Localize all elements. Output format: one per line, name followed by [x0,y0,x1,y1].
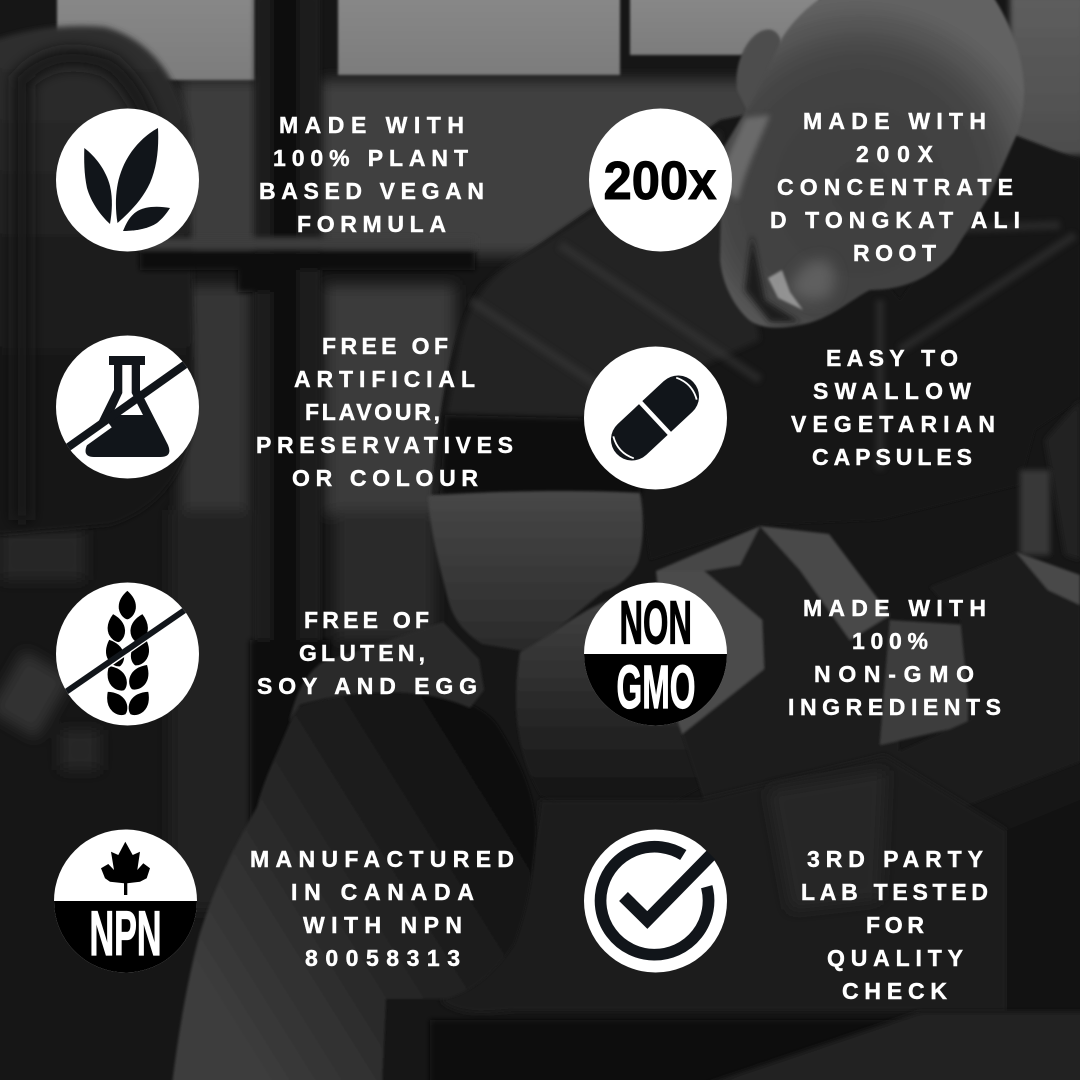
dumbbell [656,526,1080,807]
text: free of gluten: SOY AND EGG [257,673,477,699]
text: plant based [259,112,484,237]
icon: crossed out wheat [56,582,199,726]
text: lab tested: LAB TESTED [801,879,988,905]
text: free of gluten [257,607,477,699]
man: ear [737,29,782,115]
text: manufactured in canada: MANUFACTURED [250,846,514,872]
text: lab tested: 3RD PARTY [807,846,983,872]
man: short hem [289,622,484,722]
man: forearm [516,600,705,830]
text: non-gmo [788,595,1001,720]
text: lab tested: FOR [866,912,924,938]
text: non-gmo: INGREDIENTS [788,694,1001,720]
text: free of gluten: FREE OF [304,607,429,633]
icon: NON GMO badge [584,582,727,726]
text: manufactured in canada: 80058313 [305,945,460,971]
icon: leaf / plant based [56,108,199,252]
text: tongkat ali: CONCENTRATE [777,174,1013,200]
text: non-gmo: NON-GMO [814,661,974,687]
text: plant based: BASED VEGAN [259,178,484,204]
text: free of artificial: FLAVOUR, [305,399,440,425]
text: tongkat ali: D TONGKAT ALI [770,207,1020,233]
icon: NPN maple leaf badge [54,830,197,972]
man: head [720,0,1024,328]
text: plant based: 100% PLANT [273,145,468,171]
text: non-gmo: MADE WITH [803,595,986,621]
text: capsules: CAPSULES [812,444,972,470]
text: manufactured in canada: IN CANADA [291,879,474,905]
man: thigh and knee [172,689,536,1080]
man: hand and shorts [440,755,1007,1013]
text: tongkat ali: MADE WITH [803,108,986,134]
text: capsules: VEGETARIAN [791,411,995,437]
icon: check mark ring [584,830,727,972]
weight plate [0,26,195,535]
man: shirt [432,115,1080,560]
text: manufactured in canada: WITH NPN [303,912,462,938]
text: capsules: SWALLOW [813,378,971,404]
text: tongkat ali: ROOT [853,240,936,266]
text: non-gmo: 100% [852,628,928,654]
text: free of artificial: ARTIFICIAL [294,366,475,392]
text: free of artificial: OR COLOUR [292,465,478,491]
icon: NPN maple leaf badge: NPN [90,899,162,969]
text: capsules [791,345,995,470]
text: manufactured in canada [250,846,514,971]
text: lab tested [801,846,988,1004]
text: tongkat ali [770,108,1020,266]
maple leaf [101,842,150,895]
icon: 200x [589,108,732,252]
icon: NON GMO badge: GMO [616,653,696,722]
text: free of artificial: PRESERVATIVES [256,432,513,458]
text: capsules: EASY TO [826,345,958,371]
text: plant based: FORMULA [297,211,446,237]
man: biceps [428,491,643,652]
text: tongkat ali: 200X [856,141,934,167]
text: free of gluten: GLUTEN, [299,640,425,666]
icon: NON GMO badge: NON [620,588,692,658]
text: lab tested: QUALITY [827,945,963,971]
text: free of artificial: FREE OF [322,333,448,359]
icon: 200x: 200x [604,151,716,211]
text: plant based: MADE WITH [279,112,464,138]
man: right arm [1045,400,1080,560]
text: lab tested: CHECK [842,978,947,1004]
icon: crossed out flask [56,336,199,478]
icon: capsule [584,346,727,490]
text: free of artificial [256,333,513,491]
